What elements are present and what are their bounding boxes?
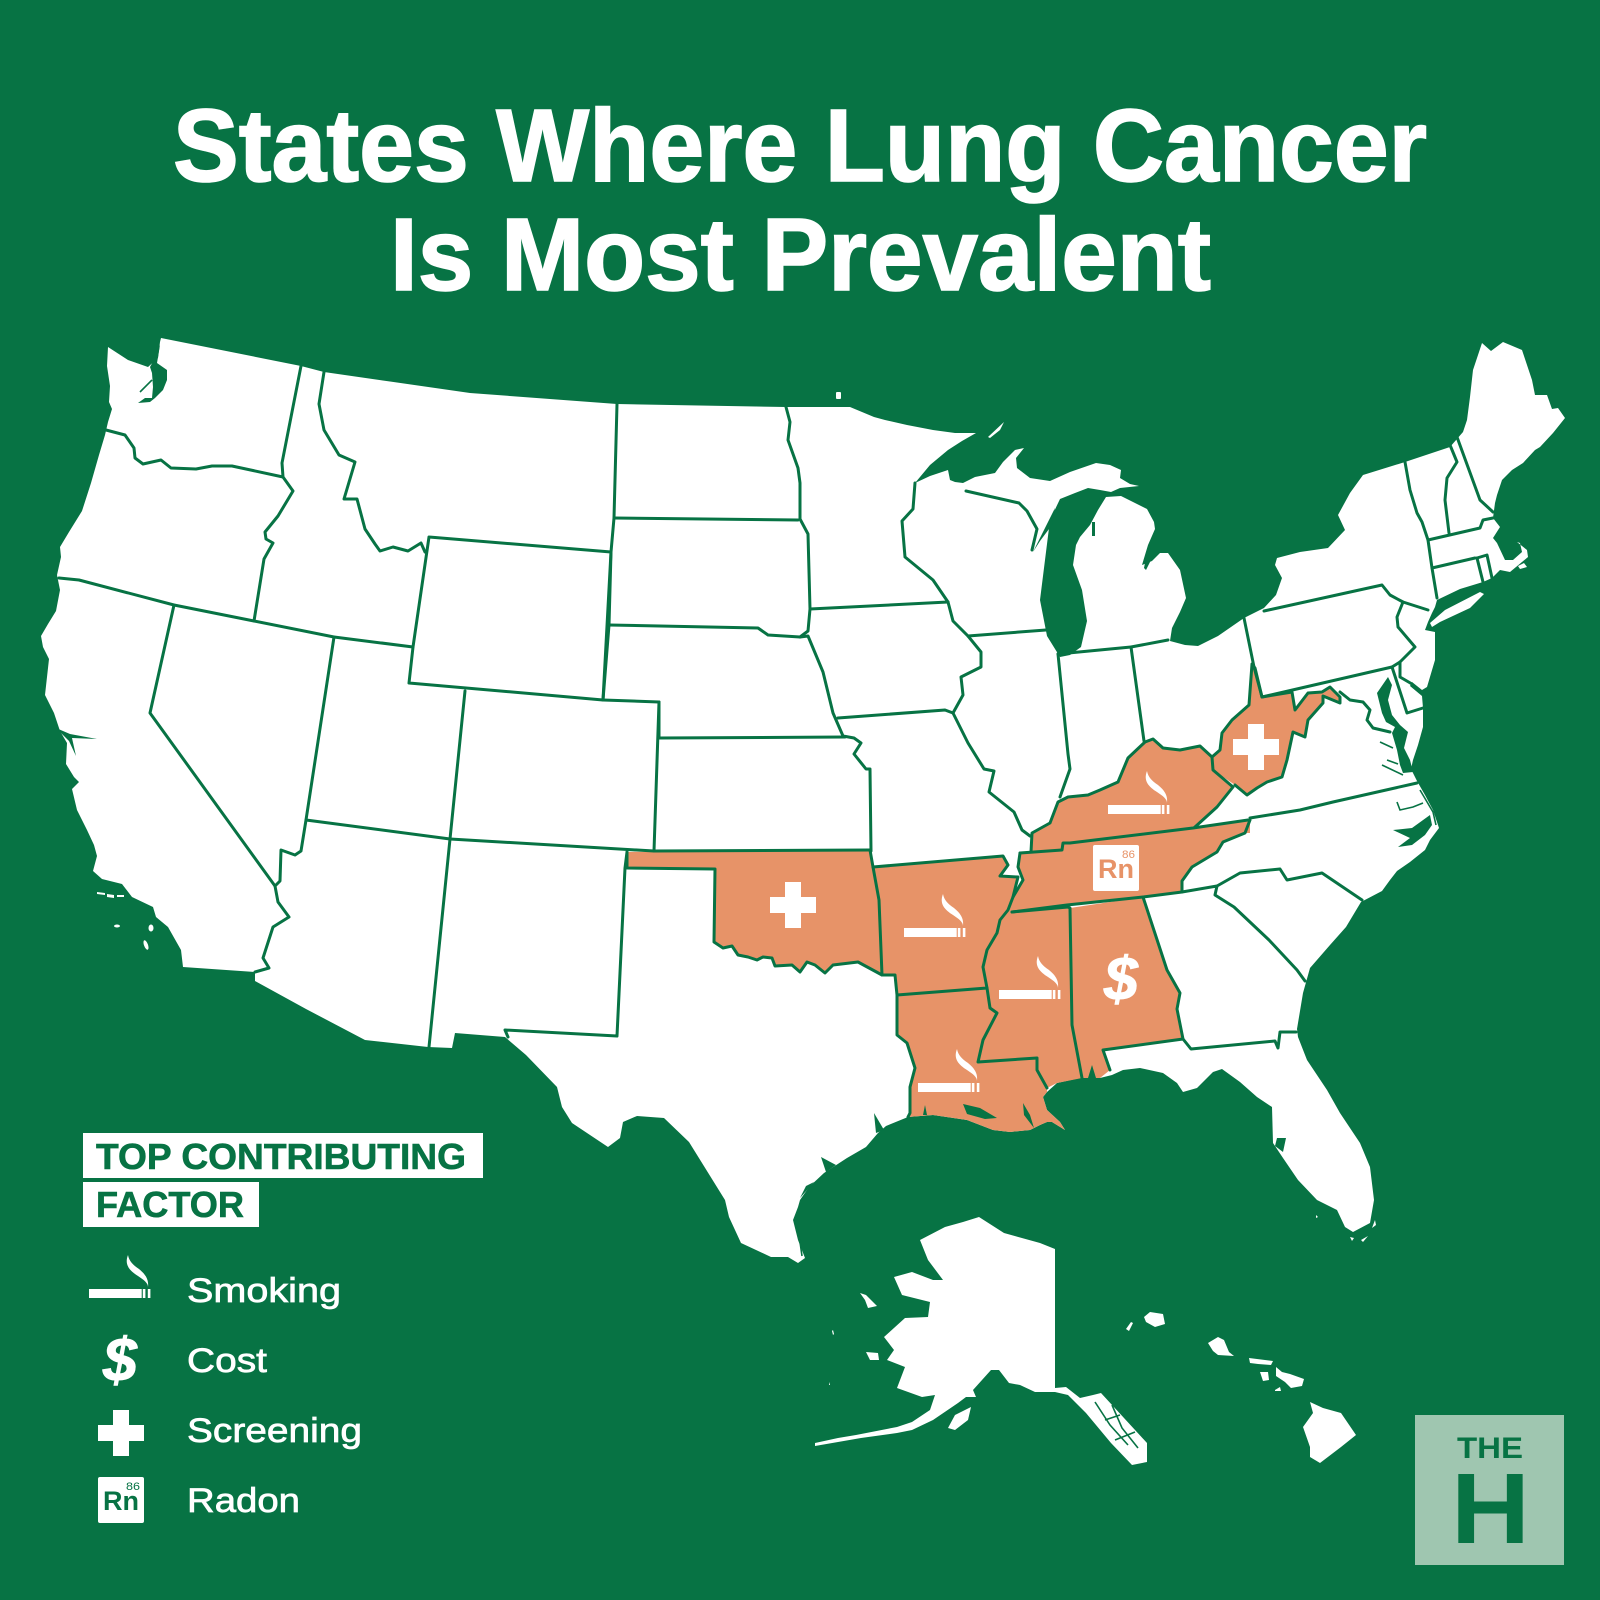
highlighted state: Kentucky (1030, 739, 1233, 852)
title (173, 88, 1427, 312)
legend: smoking: Smoking (187, 1272, 341, 1310)
icon: screening cross, Oklahoma (770, 882, 816, 928)
icon: cigarette, Louisiana (918, 1049, 979, 1092)
map: contiguous United States (41, 338, 1565, 1263)
legend: smoking (89, 1255, 341, 1310)
legend heading: FACTOR (96, 1184, 244, 1225)
title: States Where Lung Cancer (173, 88, 1427, 203)
legend: radon: 86 (126, 1481, 140, 1493)
legend heading (83, 1133, 483, 1227)
icon: screening cross, West Virginia (1233, 724, 1279, 770)
highlighted state: Oklahoma (627, 850, 882, 975)
legend: cost (102, 1326, 268, 1394)
legend heading: TOP CONTRIBUTING (96, 1136, 466, 1177)
legend: cost: $ (102, 1326, 138, 1394)
icon: radon tile, Tennessee: 86 (1122, 849, 1135, 861)
icon: cigarette, Mississippi (999, 956, 1060, 999)
icon: cigarette, Kentucky (1108, 771, 1169, 814)
highlighted state: West Virginia (1212, 664, 1340, 795)
legend: radon: Radon (187, 1482, 300, 1520)
logo: The H: THE (1457, 1432, 1523, 1465)
legend: screening (98, 1410, 362, 1456)
logo: The H: H (1451, 1453, 1530, 1565)
highlighted state: Louisiana (897, 988, 1065, 1132)
legend: cost: Cost (187, 1342, 268, 1380)
water: bays, inlets and sounds (56, 345, 1432, 1198)
alaska (815, 1217, 1147, 1465)
legend: screening: Screening (187, 1412, 362, 1450)
highlighted state: Alabama (1070, 897, 1183, 1078)
state borders (59, 366, 1493, 1117)
legend: radon: Rn (103, 1486, 139, 1516)
highlighted state: Tennessee (1008, 820, 1250, 912)
icon: radon tile, Tennessee (1093, 845, 1139, 891)
highlighted state: Arkansas (873, 856, 1018, 995)
small islands and Lake of the Woods angle (97, 392, 1527, 1242)
title: Is Most Prevalent (390, 197, 1211, 312)
legend: radon (98, 1477, 300, 1523)
icon: cigarette, Arkansas (904, 894, 965, 937)
logo: The H (1415, 1415, 1564, 1565)
hawaii (1126, 1312, 1356, 1463)
highlighted state: Mississippi (978, 907, 1082, 1088)
icon: dollar sign, Alabama: $ (1103, 945, 1139, 1013)
icon: radon tile, Tennessee: Rn (1098, 854, 1134, 884)
water: thin channels and rivers (140, 380, 1436, 1256)
